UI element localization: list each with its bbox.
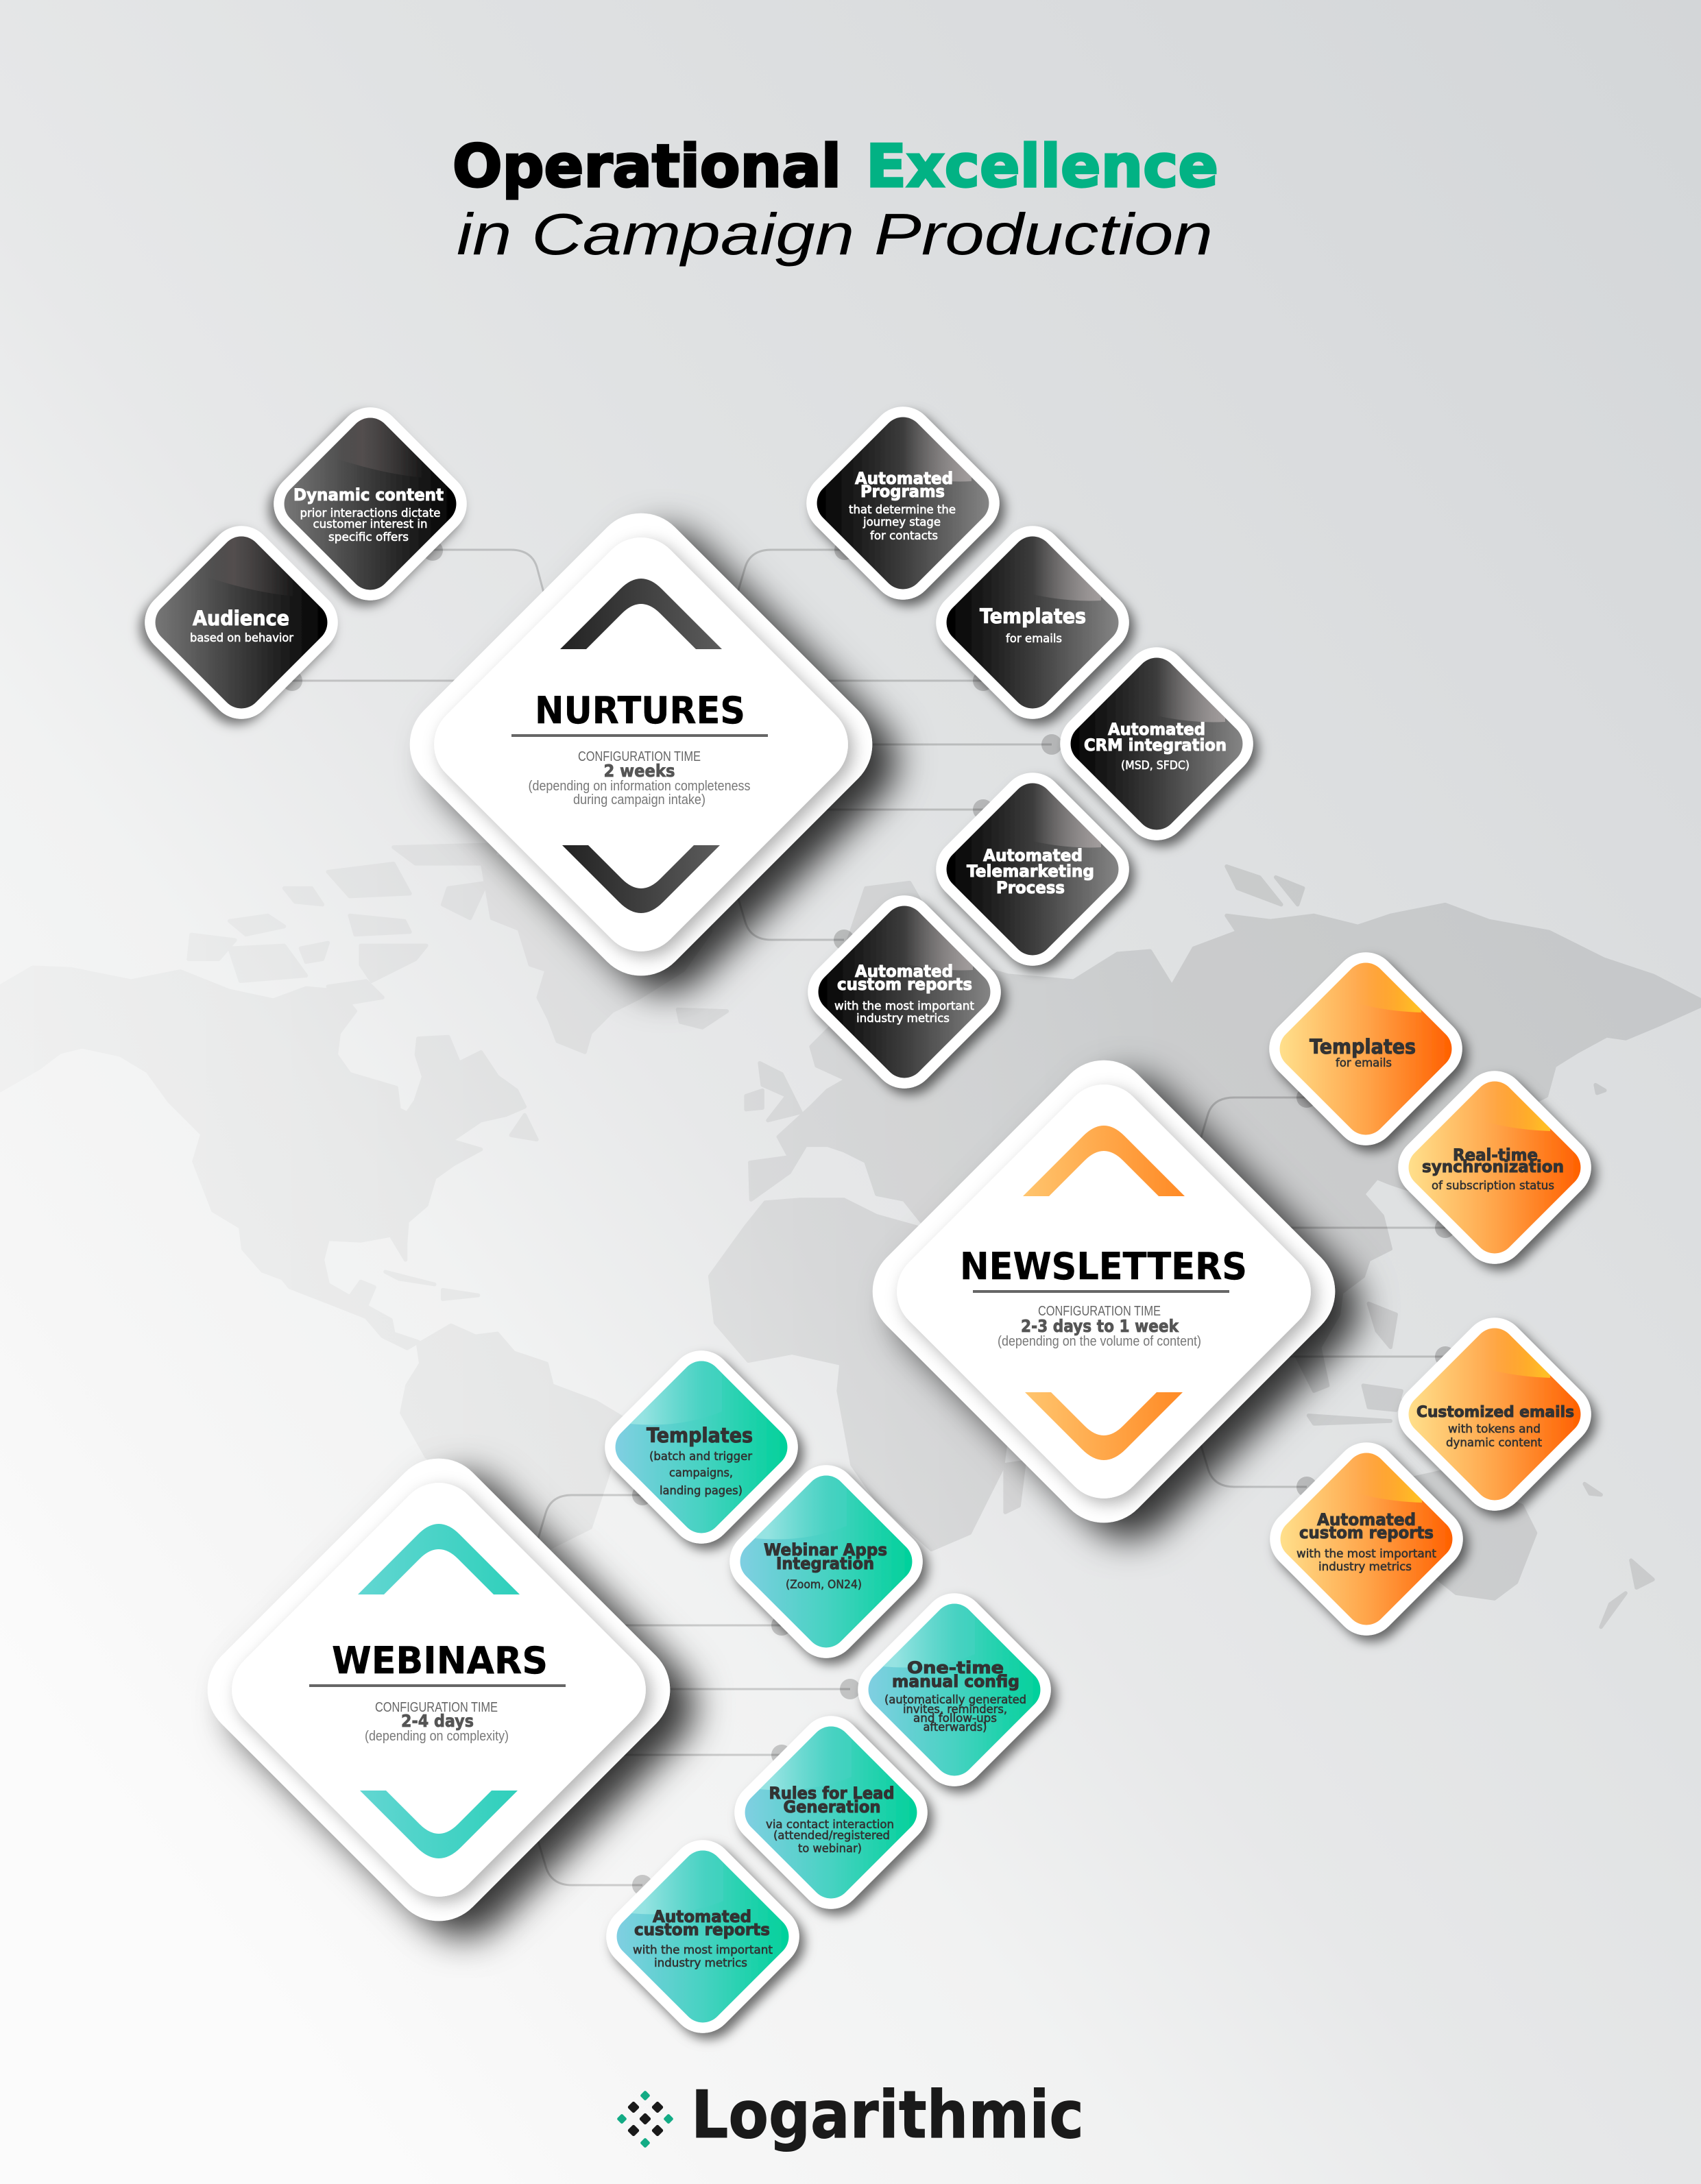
card: rules for lead generation: to webinar) xyxy=(798,1842,862,1856)
heading: webinars: WEBINARS xyxy=(332,1639,548,1682)
configuration time: nurtures: CONFIGURATION TIME xyxy=(578,749,701,764)
chevrons: nurtures xyxy=(560,579,722,913)
connector lines xyxy=(282,539,1456,1895)
card: customized emails: Customized emails xyxy=(1416,1404,1574,1421)
card: automated custom reports (nurtures): industry metrics xyxy=(856,1012,950,1026)
title: Excellence xyxy=(866,132,1218,201)
card: customized emails: with tokens and xyxy=(1448,1422,1541,1436)
card: automated telemarketing process: Automated xyxy=(983,846,1083,865)
card: automated CRM integration xyxy=(1047,634,1266,853)
card: webinar apps integration xyxy=(716,1452,936,1671)
card: one-time manual config: manual config xyxy=(892,1672,1020,1691)
card: one-time manual config xyxy=(845,1580,1064,1799)
heading: newsletters: NEWSLETTERS xyxy=(960,1245,1247,1288)
card: automated programs xyxy=(793,393,1013,613)
card: templates for emails (newsletters): Templates xyxy=(1310,1035,1416,1058)
card: templates for emails (nurtures): for emails xyxy=(1006,632,1062,646)
card: automated telemarketing process xyxy=(923,760,1142,979)
card: webinar apps integration: (Zoom, ON24) xyxy=(786,1578,862,1592)
title xyxy=(453,132,1218,267)
card: real-time synchronization xyxy=(1385,1058,1604,1277)
title: in Campaign Production xyxy=(457,202,1213,267)
card: templates for emails (nurtures): Templates xyxy=(980,605,1086,628)
title: Operational xyxy=(453,132,841,201)
card: customized emails xyxy=(1385,1305,1604,1524)
card: automated programs: journey stage xyxy=(862,515,941,529)
card: customized emails: dynamic content xyxy=(1446,1436,1542,1450)
card: templates (webinars): Templates xyxy=(647,1424,753,1447)
panel: nurtures xyxy=(390,494,892,995)
card: automated custom reports (nurtures): Automated xyxy=(855,962,953,981)
configuration time: webinars: 2-4 days xyxy=(401,1711,474,1731)
configuration time: webinars: CONFIGURATION TIME xyxy=(375,1700,498,1715)
card: automated CRM integration: CRM integration xyxy=(1084,736,1227,755)
card: dynamic content: prior interactions dictate xyxy=(300,507,440,520)
card: automated CRM integration: Automated xyxy=(1108,720,1205,739)
logo: Logarithmic xyxy=(691,2078,1084,2153)
card: automated custom reports (nurtures): custom reports xyxy=(837,975,972,994)
card: templates for emails (newsletters) xyxy=(1256,939,1475,1158)
heading: nurtures: NURTURES xyxy=(535,689,745,732)
card: one-time manual config: and follow-ups xyxy=(913,1712,997,1725)
card: automated custom reports (webinars): with the most important xyxy=(633,1943,773,1957)
icon: logo mark xyxy=(616,2090,674,2148)
card: audience: based on behavior xyxy=(190,631,293,645)
card: automated custom reports (webinars): industry metrics xyxy=(654,1956,747,1970)
card: one-time manual config: invites, reminders, xyxy=(903,1703,1007,1716)
card: webinar apps integration: Webinar Apps xyxy=(764,1540,887,1560)
card: automated CRM integration: (MSD, SFDC) xyxy=(1121,759,1190,773)
card: automated custom reports (webinars) xyxy=(593,1827,812,2046)
card: automated custom reports (nurtures): with the most important xyxy=(834,999,974,1013)
configuration time: nurtures: (depending on information completeness xyxy=(528,779,750,794)
card: automated programs: for contacts xyxy=(870,529,938,543)
card: rules for lead generation: (attended/registered xyxy=(773,1829,890,1843)
panel: newsletters xyxy=(853,1041,1355,1542)
card: templates (webinars): landing pages) xyxy=(660,1484,743,1498)
card: automated programs: Automated xyxy=(855,469,953,488)
configuration time: webinars xyxy=(365,1700,509,1744)
card: audience xyxy=(132,513,351,732)
card: templates (webinars): (batch and trigger xyxy=(649,1450,752,1464)
card: automated programs: Programs xyxy=(860,482,945,501)
card: one-time manual config: afterwards) xyxy=(923,1721,987,1734)
card: templates (webinars): campaigns, xyxy=(669,1466,733,1480)
configuration time: newsletters: CONFIGURATION TIME xyxy=(1038,1304,1161,1319)
chevrons: newsletters xyxy=(1023,1126,1185,1460)
configuration time: newsletters: 2-3 days to 1 week xyxy=(1021,1316,1179,1336)
card: automated custom reports (newsletters): with the most important xyxy=(1296,1547,1436,1561)
card: automated custom reports (newsletters): custom reports xyxy=(1299,1523,1434,1542)
card: templates for emails (nurtures) xyxy=(923,513,1142,732)
chevrons: webinars xyxy=(358,1524,520,1858)
card: real-time synchronization: of subscription status xyxy=(1432,1179,1554,1193)
card: automated telemarketing process: Telemarketing xyxy=(967,862,1094,881)
card: automated custom reports (newsletters): industry metrics xyxy=(1318,1560,1412,1574)
configuration time: nurtures xyxy=(528,749,750,808)
configuration time: nurtures: during campaign intake) xyxy=(573,792,705,808)
world map background xyxy=(292,843,1701,1629)
card: automated custom reports (nurtures) xyxy=(795,882,1014,1102)
card: dynamic content: Dynamic content xyxy=(293,485,444,505)
card: automated telemarketing process: Process xyxy=(996,878,1065,897)
card: automated custom reports (newsletters): Automated xyxy=(1317,1510,1416,1529)
card: rules for lead generation xyxy=(721,1703,941,1922)
card: dynamic content: customer interest in xyxy=(313,518,428,531)
card: rules for lead generation: Generation xyxy=(783,1797,880,1817)
card: automated custom reports (webinars): Automated xyxy=(653,1907,751,1926)
card: templates (webinars) xyxy=(592,1337,811,1557)
card: automated programs: that determine the xyxy=(849,503,956,517)
card: audience: Audience xyxy=(193,607,289,630)
card: webinar apps integration: Integration xyxy=(776,1554,874,1573)
card: rules for lead generation: via contact interaction xyxy=(766,1818,894,1832)
card: real-time synchronization: synchronization xyxy=(1422,1157,1564,1176)
card: automated custom reports (newsletters) xyxy=(1257,1429,1476,1649)
card: real-time synchronization: Real-time xyxy=(1453,1145,1538,1165)
configuration time: newsletters xyxy=(998,1304,1201,1349)
configuration time: nurtures: 2 weeks xyxy=(603,761,675,781)
configuration time: webinars: (depending on complexity) xyxy=(365,1729,509,1744)
card: one-time manual config: One-time xyxy=(907,1658,1004,1677)
card: one-time manual config: (automatically generated xyxy=(884,1693,1026,1707)
card: automated custom reports (webinars): custom reports xyxy=(634,1920,770,1939)
configuration time: newsletters: (depending on the volume of content) xyxy=(998,1334,1201,1349)
card: dynamic content xyxy=(261,394,480,614)
card: dynamic content: specific offers xyxy=(328,531,409,544)
panel: webinars xyxy=(188,1439,690,1941)
card: rules for lead generation: Rules for Lead xyxy=(769,1784,894,1803)
card: templates for emails (newsletters): for emails xyxy=(1336,1056,1392,1070)
